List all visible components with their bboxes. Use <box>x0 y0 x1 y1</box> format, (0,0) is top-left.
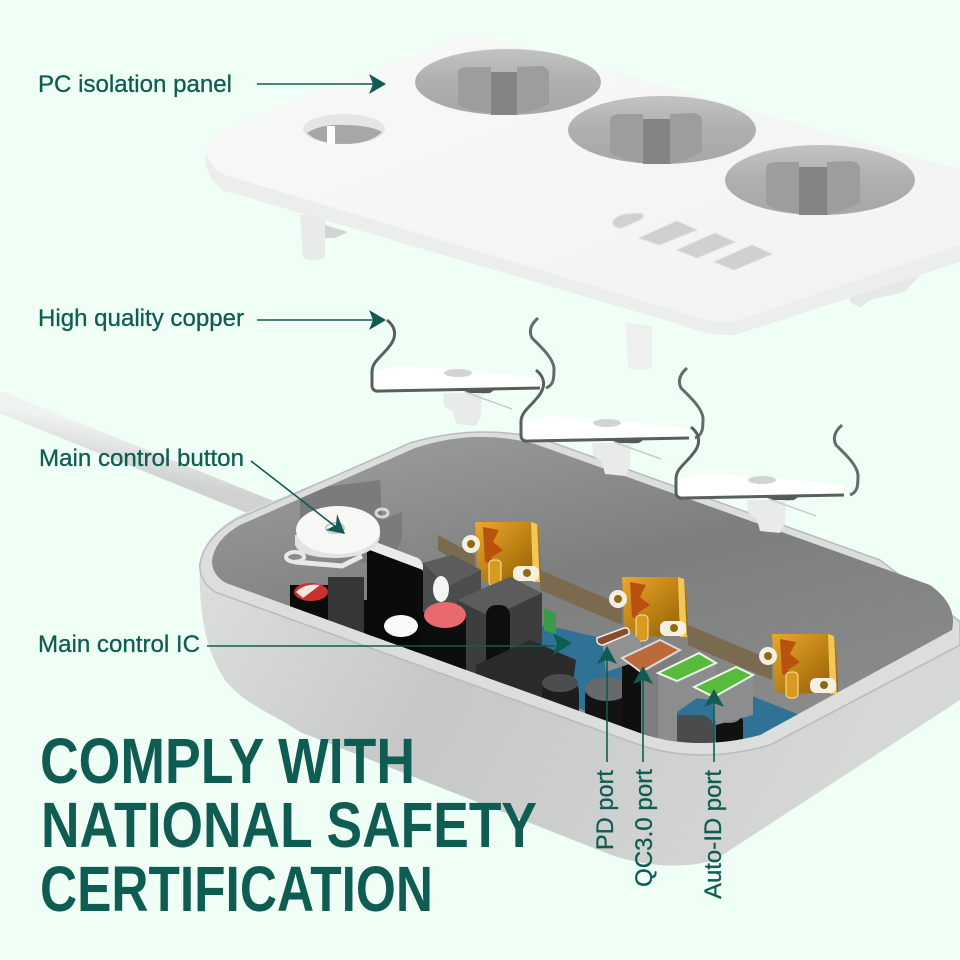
label: Auto-ID port <box>700 689 727 899</box>
back wall strip left <box>438 535 475 567</box>
label: PD port <box>592 646 619 850</box>
copper strip set two <box>521 368 703 476</box>
arrow to QC3.0 port <box>633 666 653 762</box>
blue circuit board <box>542 626 798 742</box>
QC3.0 port <box>622 640 680 740</box>
capacitors and relays <box>290 542 556 685</box>
USB slot one <box>639 221 697 245</box>
gold terminal left <box>462 522 541 586</box>
mounting pegs <box>300 215 920 370</box>
label: PD port: PD port <box>592 770 619 850</box>
arrow to Auto-ID port <box>704 689 724 762</box>
label: QC3.0 port: QC3.0 port <box>631 769 658 887</box>
label: PC isolation panel: PC isolation panel <box>38 71 232 98</box>
power button hole <box>303 114 385 144</box>
Auto-ID port one <box>658 653 716 760</box>
title: COMPLY WITH <box>40 725 415 797</box>
main control button <box>286 506 388 566</box>
back wall strip middle <box>540 570 622 625</box>
arrow to IC <box>207 633 572 655</box>
panel lower lip <box>205 36 960 335</box>
label: main control button <box>39 445 345 534</box>
button mount bracket <box>300 480 402 570</box>
label: main control button: Main control button <box>39 445 244 472</box>
arrow to PD port <box>597 646 617 762</box>
gold terminal right <box>759 634 838 698</box>
housing exterior shell <box>200 432 960 866</box>
USB slot two <box>677 233 735 258</box>
label: main control IC <box>38 631 572 658</box>
Auto-ID port two <box>694 667 753 725</box>
arrow to copper <box>257 310 386 330</box>
socket three <box>725 145 915 215</box>
panel: lower housing with electronics <box>200 432 960 866</box>
label: PC isolation panel <box>38 71 386 98</box>
title <box>40 725 537 925</box>
power cable <box>0 400 310 527</box>
panel: copper contact strips <box>372 318 858 533</box>
panel face <box>205 36 960 322</box>
gold terminal middle <box>609 577 688 641</box>
back wall strip right <box>688 625 772 680</box>
housing interior <box>212 437 953 743</box>
interior electronics clipped to cavity <box>290 480 838 764</box>
title: NATIONAL SAFETY <box>41 789 537 861</box>
title: CERTIFICATION <box>40 853 433 925</box>
panel: PC isolation top cover <box>205 36 960 370</box>
label: main control IC: Main control IC <box>38 631 200 658</box>
label: high quality copper: High quality copper <box>38 305 244 332</box>
label: high quality copper <box>38 305 386 332</box>
socket one <box>415 49 601 115</box>
PD port <box>597 628 641 672</box>
copper strip set three <box>676 425 858 533</box>
copper strip set one <box>372 318 554 426</box>
socket two <box>568 96 756 164</box>
label: QC3.0 port <box>631 666 658 887</box>
arrow to button <box>251 461 345 534</box>
USB-C slot <box>613 213 644 228</box>
USB slot three <box>714 245 772 270</box>
housing rim <box>200 432 960 755</box>
inductor <box>476 640 576 698</box>
lower capacitors <box>542 664 743 743</box>
arrow to panel <box>257 74 386 94</box>
label: Auto-ID port: Auto-ID port <box>700 770 727 899</box>
